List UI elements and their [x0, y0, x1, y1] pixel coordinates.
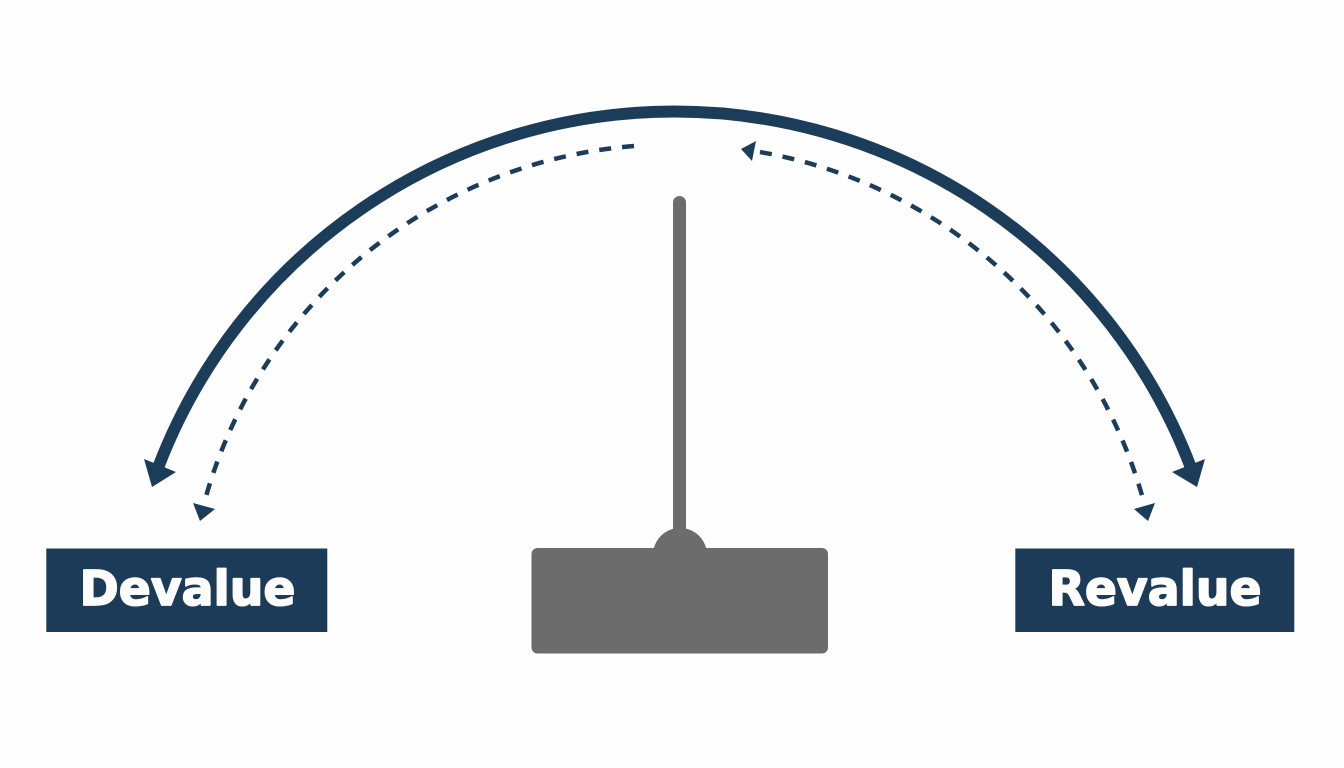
label: Devalue	[46, 548, 327, 632]
label: Devalue: Devalue	[80, 561, 296, 617]
pivot: vertical needle and base	[532, 196, 828, 654]
label: Revalue: Revalue	[1048, 561, 1262, 617]
dashed arc toward revalue	[741, 141, 1155, 521]
solid arc with arrows to devalue and revalue	[144, 112, 1205, 487]
dashed arc toward devalue	[193, 146, 634, 521]
label: Revalue	[1015, 548, 1294, 632]
